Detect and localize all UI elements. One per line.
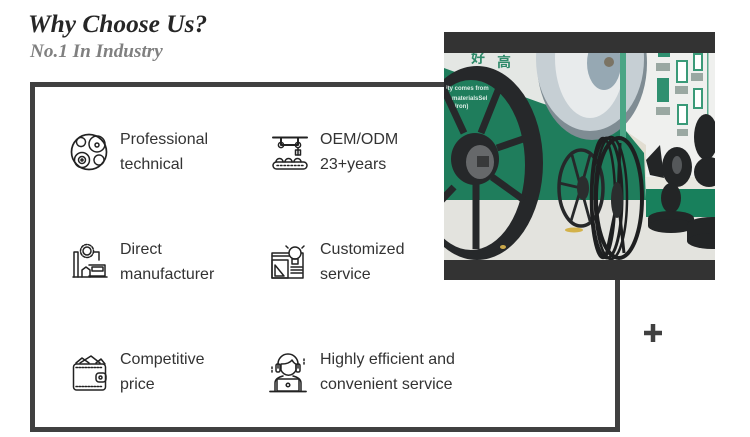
sign lettering: materialsSel — [452, 96, 488, 102]
text: competitive price — [120, 351, 204, 393]
icon: factory with gear — [72, 244, 108, 278]
text: OEM/ODM 23+years — [320, 131, 398, 173]
text: competitive price: price — [120, 376, 155, 393]
text: professional technical — [120, 131, 208, 173]
text: direct manufacturer — [120, 241, 214, 283]
text: direct manufacturer: manufacturer — [120, 266, 214, 283]
text: OEM/ODM 23+years: 23+years — [320, 156, 386, 173]
text: customized service — [320, 241, 404, 283]
right side pulleys — [646, 114, 737, 249]
subtitle: No.1 In Industry — [30, 41, 163, 62]
text: competitive price: Competitive — [120, 351, 204, 368]
icon: design and bulb — [271, 245, 305, 279]
big wheel — [411, 66, 543, 260]
text: professional technical: technical — [120, 156, 183, 173]
panel: photo with dark bands — [444, 32, 715, 280]
text: highly efficient and convenient service: convenient service — [320, 376, 453, 393]
sign characters — [471, 50, 511, 70]
text: highly efficient and convenient service: Highly efficient and — [320, 351, 455, 368]
icon: gears globe — [70, 134, 108, 170]
text: customized service: Customized — [320, 241, 404, 258]
wall signage — [677, 54, 702, 124]
icon: customer service agent — [269, 353, 307, 392]
text: customized service: service — [320, 266, 371, 283]
icon: wallet — [72, 355, 107, 391]
front wheel — [591, 137, 642, 259]
sign lettering: Iron) — [455, 104, 468, 110]
silver pulley — [537, 0, 647, 140]
yellow feet — [565, 228, 583, 232]
title: Why Choose Us? — [28, 10, 207, 38]
sign lettering — [446, 86, 489, 110]
small wheel — [559, 150, 603, 226]
sign lettering: ity comes from — [446, 86, 489, 92]
text: direct manufacturer: Direct — [120, 241, 162, 258]
sign characters: 高 — [497, 54, 511, 70]
photo: pulleys at trade show — [444, 53, 715, 260]
text: professional technical: Professional — [120, 131, 208, 148]
panel: frame — [30, 82, 620, 432]
text: highly efficient and convenient service — [320, 351, 455, 393]
text: OEM/ODM 23+years: OEM/ODM — [320, 131, 398, 148]
icon: robot arm conveyor — [272, 136, 308, 170]
icon: plus — [644, 324, 662, 342]
